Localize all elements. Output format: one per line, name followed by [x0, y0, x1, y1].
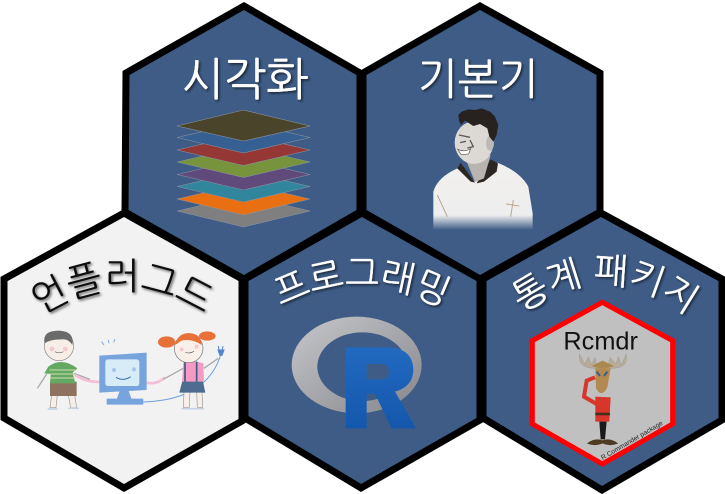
title: 시각화: 시각화: [182, 54, 308, 105]
curved title: 언플러그드: 언플러그드: [32, 258, 214, 315]
hexagon: 시각화: [125, 6, 360, 279]
curved title: 프로그래밍: 프로그래밍: [274, 258, 453, 308]
badge caption: R Commander package: [600, 420, 664, 462]
hexagon: 프로그래밍: [246, 215, 484, 492]
illustration: children holding hands with a computer: [37, 331, 224, 409]
badge: Rcmdr hex sticker: [532, 302, 673, 464]
photo: smiling footballer: [433, 108, 533, 230]
hexagon: 기본기: [363, 6, 600, 279]
curved title: 통계 패키지: 통계 패키지: [513, 254, 702, 317]
moose salute: [579, 354, 627, 444]
hexagon: 언플러그드: [0, 210, 246, 492]
boy: [37, 331, 90, 409]
icon: R logo: [292, 317, 422, 428]
hexagon: 통계 패키지: [483, 210, 725, 494]
badge title: Rcmdr: [563, 327, 639, 355]
computer: [75, 339, 224, 405]
girl: [158, 331, 218, 409]
icon: layer stack: [177, 110, 310, 227]
title: 기본기: 기본기: [417, 56, 539, 104]
